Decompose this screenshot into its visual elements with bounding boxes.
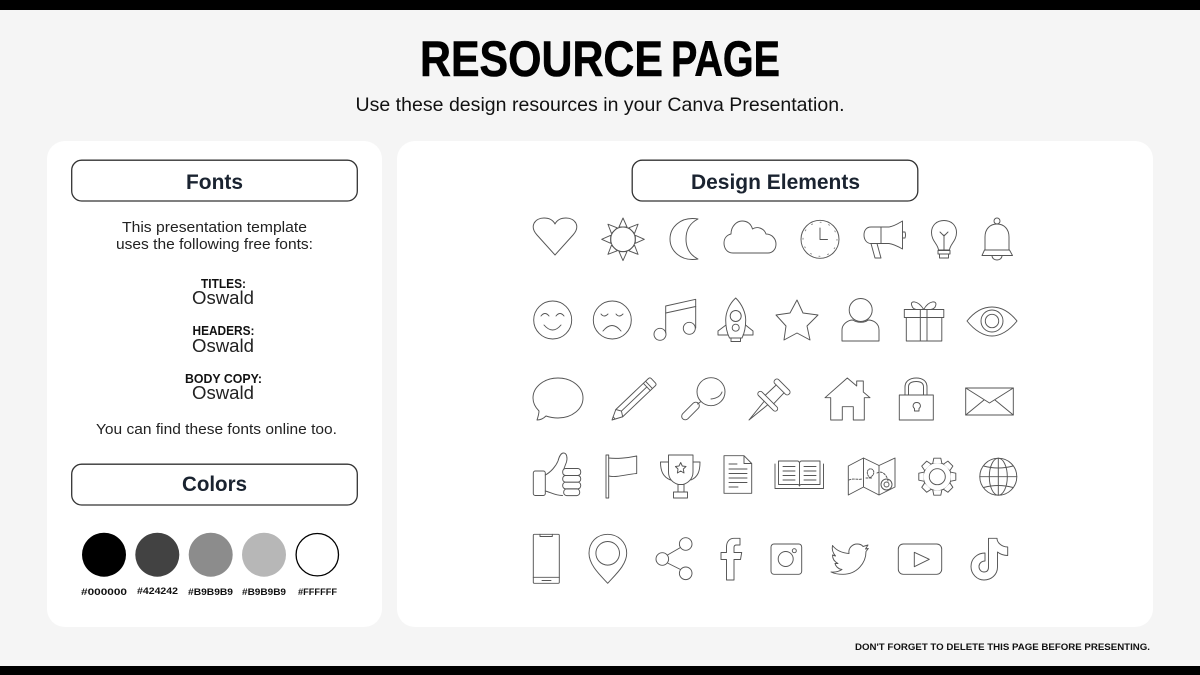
heading: design elements — [632, 160, 918, 201]
swatch: #B9B9B9 light: #B9B9B9 — [242, 587, 286, 598]
icon: twitter — [831, 544, 868, 574]
icon: gift — [904, 302, 944, 341]
icon: thumbs up — [533, 453, 581, 496]
heading: colors: Colors — [182, 472, 247, 496]
icon: youtube — [898, 544, 942, 574]
icon: light bulb — [932, 220, 956, 258]
swatch: #B9B9B9 dark — [188, 533, 233, 598]
icon: flag — [606, 455, 637, 498]
icon: globe — [980, 458, 1017, 495]
icon: eye — [967, 307, 1017, 336]
panel: fonts and colors — [47, 141, 382, 627]
icon: star — [776, 300, 818, 340]
icon: bell — [982, 218, 1012, 260]
heading: fonts: Fonts — [186, 170, 243, 194]
text: body copy font: Oswald — [192, 382, 254, 403]
icon: document — [724, 456, 752, 493]
text: body copy font: BODY COPY: — [185, 372, 262, 386]
icon: map — [848, 458, 895, 495]
icon: magnifying glass — [680, 378, 725, 421]
icon: location pin — [589, 534, 627, 583]
icon: house — [825, 378, 870, 420]
icon: gear — [919, 458, 956, 495]
swatch: #B9B9B9 dark: #B9B9B9 — [188, 587, 233, 598]
swatch: #B9B9B9 light — [242, 533, 286, 598]
heading: fonts — [72, 160, 357, 201]
footer note: DON'T FORGET TO DELETE THIS PAGE BEFORE PRESENTING. — [855, 642, 1150, 653]
text: titles font — [192, 277, 254, 308]
subtitle: Use these design resources in your Canva Presentation. — [356, 94, 844, 116]
text: titles font: TITLES: — [201, 277, 246, 291]
title: PAGE — [671, 31, 780, 87]
text: body copy font — [185, 372, 262, 403]
text: intro — [116, 219, 313, 253]
icon: music notes — [654, 299, 696, 340]
text: intro: This presentation template — [122, 219, 307, 236]
icon: pencil — [609, 377, 657, 424]
icon: share — [656, 538, 692, 580]
icon: smartphone — [533, 534, 559, 583]
swatch: #FFFFFF — [296, 534, 338, 598]
swatch: #000000 — [81, 533, 127, 598]
icon: moon — [670, 219, 698, 259]
icon: push pin — [740, 376, 793, 429]
icon: envelope — [966, 388, 1013, 415]
icon: trophy — [660, 455, 700, 498]
icon: cloud — [724, 221, 776, 253]
icon: facebook — [721, 538, 742, 580]
icon: person — [842, 298, 879, 341]
icon: rocket — [718, 298, 753, 342]
text: intro: uses the following free fonts: — [116, 236, 313, 253]
swatch: #424242 — [135, 533, 179, 597]
icon: sun — [602, 218, 644, 261]
text: headers font: Oswald — [192, 335, 254, 356]
text: titles font: Oswald — [192, 287, 254, 308]
icon: smiling face — [534, 301, 572, 339]
title: RESOURCE — [420, 31, 663, 87]
icon: padlock — [899, 378, 933, 420]
icon: sad face — [593, 301, 631, 339]
icon: speech bubble — [533, 378, 583, 420]
icon: clock — [801, 220, 839, 258]
text: find fonts note: You can find these fonts online too. — [96, 421, 337, 438]
icon: megaphone — [864, 221, 906, 258]
heading: colors — [72, 464, 357, 505]
swatch: #FFFFFF: #FFFFFF — [298, 587, 337, 598]
text: headers font: HEADERS: — [192, 324, 254, 338]
swatch: #424242: #424242 — [137, 586, 178, 597]
icon: open book — [775, 461, 824, 488]
panel: design elements — [397, 141, 1153, 627]
heading: design elements: Design Elements — [691, 170, 860, 194]
icon: tiktok — [971, 538, 1008, 580]
icon: instagram — [771, 544, 802, 574]
icon: heart — [533, 218, 577, 255]
text: headers font — [192, 324, 254, 356]
swatch: #000000: #000000 — [81, 587, 127, 598]
